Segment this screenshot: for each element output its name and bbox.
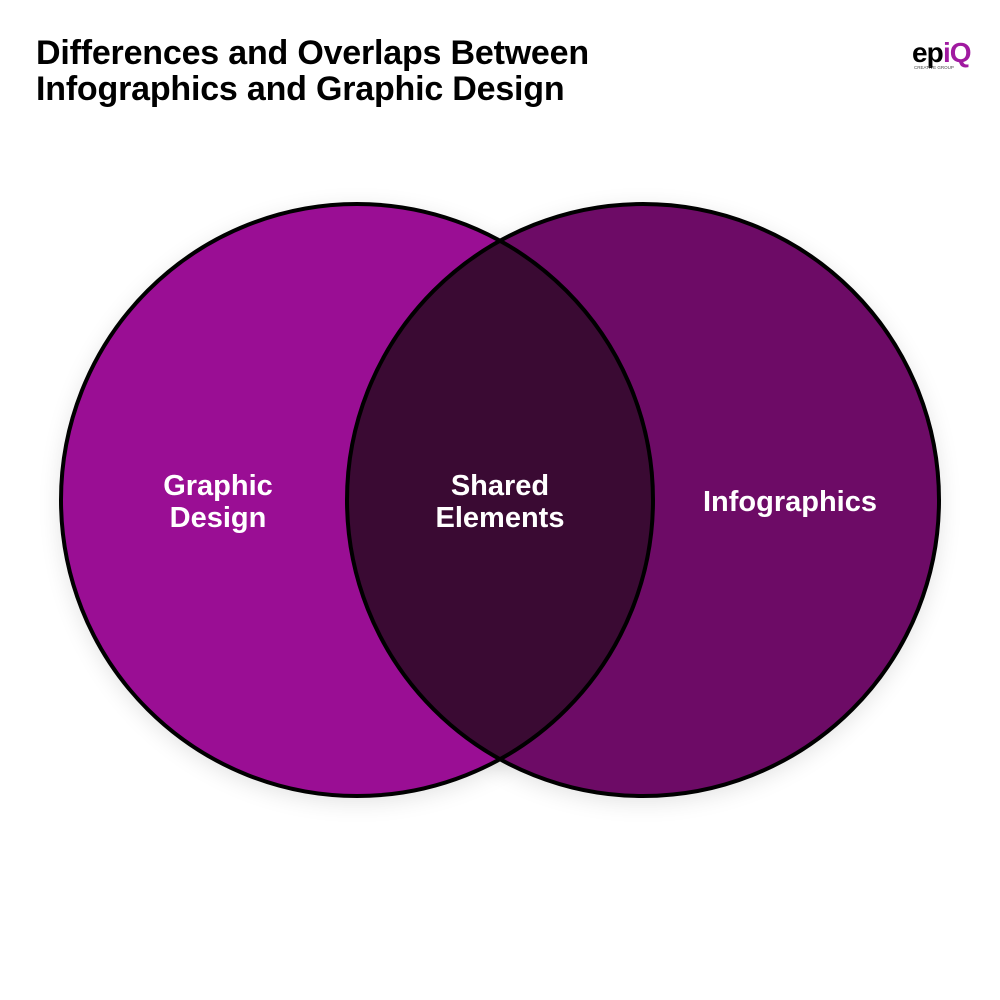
label: shared elements: Elements	[436, 502, 564, 534]
overlap: shared elements	[349, 243, 651, 757]
logo	[912, 38, 971, 70]
title: Infographics and Graphic Design	[36, 70, 564, 108]
label: infographics: Infographics	[703, 486, 877, 518]
venn diagram	[54, 202, 946, 808]
title: Differences and Overlaps Between	[36, 34, 589, 72]
logo: CREATIVE GROUP	[914, 65, 954, 70]
label: graphic design: Graphic	[163, 470, 273, 502]
title	[36, 34, 589, 108]
label: graphic design: Design	[170, 502, 266, 534]
label: shared elements: Shared	[451, 470, 549, 502]
circle: infographics	[347, 204, 939, 796]
circle: graphic design	[61, 204, 653, 796]
